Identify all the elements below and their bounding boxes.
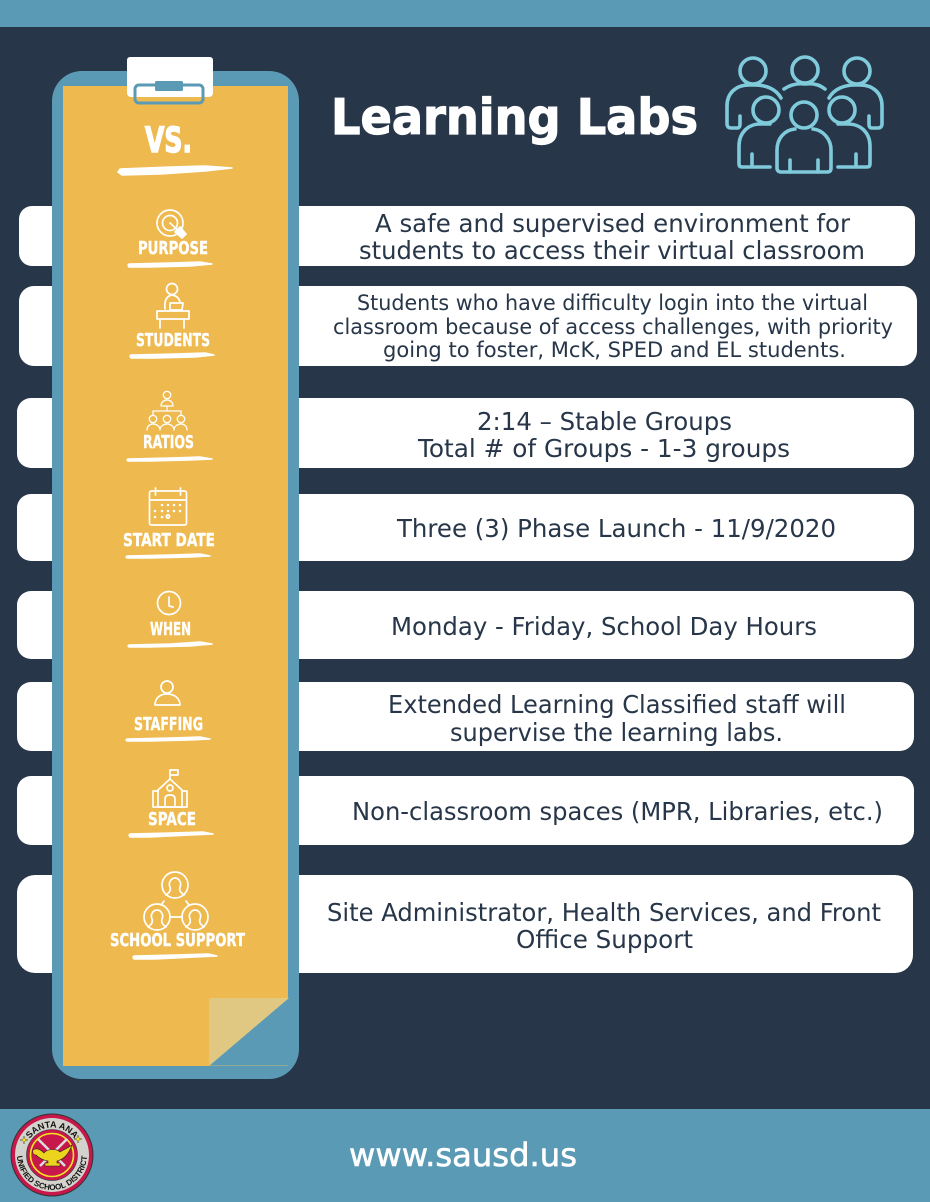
heading: vs: VS. bbox=[145, 121, 192, 161]
heading: vs bbox=[118, 121, 232, 175]
row: ratios bbox=[127, 391, 790, 463]
row: staffing bbox=[126, 681, 846, 747]
text: ratios: Total # of Groups - 1-3 groups bbox=[417, 434, 790, 463]
label: ratios: RATIOS bbox=[143, 432, 194, 453]
text: purpose: A safe and supervised environment for bbox=[375, 209, 851, 238]
quills and lamp bbox=[38, 1139, 67, 1166]
icon: student at desk bbox=[157, 284, 189, 328]
icon: school building bbox=[153, 770, 187, 807]
top band bbox=[0, 0, 930, 27]
text: purpose: students to access their virtual classroom bbox=[359, 236, 865, 265]
row: students bbox=[130, 284, 893, 362]
text: start date: Three (3) Phase Launch - 11/9/2020 bbox=[396, 514, 836, 543]
icon: connected people bbox=[144, 872, 208, 930]
stars bbox=[20, 1135, 82, 1144]
label: when: WHEN bbox=[150, 619, 191, 640]
text: students: Students who have difficulty login into the virtual bbox=[357, 291, 868, 315]
row: school support bbox=[110, 872, 881, 959]
text: students bbox=[333, 291, 893, 362]
label: space: SPACE bbox=[148, 809, 196, 830]
title: Learning Labs bbox=[331, 89, 698, 146]
label: purpose: PURPOSE bbox=[138, 238, 208, 259]
icon: calendar bbox=[150, 488, 186, 525]
text: staffing: Extended Learning Classified staff will bbox=[388, 690, 846, 719]
text: school support bbox=[327, 898, 881, 954]
text: students: classroom because of access challenges, with priority bbox=[333, 315, 893, 339]
text: school support: Site Administrator, Health Services, and Front bbox=[327, 898, 881, 927]
text: students: going to foster, McK, SPED and EL students. bbox=[383, 338, 846, 362]
footer band bbox=[0, 1109, 930, 1202]
row: space bbox=[129, 770, 883, 837]
label: students: STUDENTS bbox=[136, 330, 210, 351]
panel: clipboard bbox=[52, 57, 299, 1079]
logo: school district seal: UNIFIED SCHOOL DISTRICT bbox=[17, 1156, 87, 1190]
logo: school district seal bbox=[10, 1114, 94, 1196]
footer url: www.sausd.us bbox=[349, 1136, 577, 1174]
icon: hierarchy bbox=[147, 391, 187, 430]
icon: person bbox=[155, 681, 180, 705]
row: when bbox=[128, 592, 817, 647]
icon: group of people bbox=[727, 57, 882, 172]
text: when: Monday - Friday, School Day Hours bbox=[391, 612, 817, 641]
label: staffing: STAFFING bbox=[134, 714, 203, 735]
icon: target bbox=[157, 210, 186, 238]
icon: clock bbox=[158, 592, 180, 614]
text: staffing bbox=[388, 690, 846, 747]
text: space: Non-classroom spaces (MPR, Libraries, etc.) bbox=[352, 797, 883, 826]
label: school support: SCHOOL SUPPORT bbox=[110, 930, 246, 951]
clipboard clip bbox=[127, 57, 213, 103]
text: ratios: 2:14 – Stable Groups bbox=[477, 407, 732, 436]
text: ratios bbox=[417, 407, 790, 463]
label: start date: START DATE bbox=[123, 530, 215, 551]
logo: school district seal: SANTA ANA bbox=[26, 1121, 78, 1138]
text: school support: Office Support bbox=[516, 925, 693, 954]
page curl bbox=[209, 998, 289, 1066]
text: purpose bbox=[359, 209, 865, 265]
panel: row backgrounds bbox=[17, 206, 917, 973]
row: purpose bbox=[128, 209, 865, 267]
text: staffing: supervise the learning labs. bbox=[450, 718, 783, 747]
row: start date bbox=[123, 488, 836, 558]
